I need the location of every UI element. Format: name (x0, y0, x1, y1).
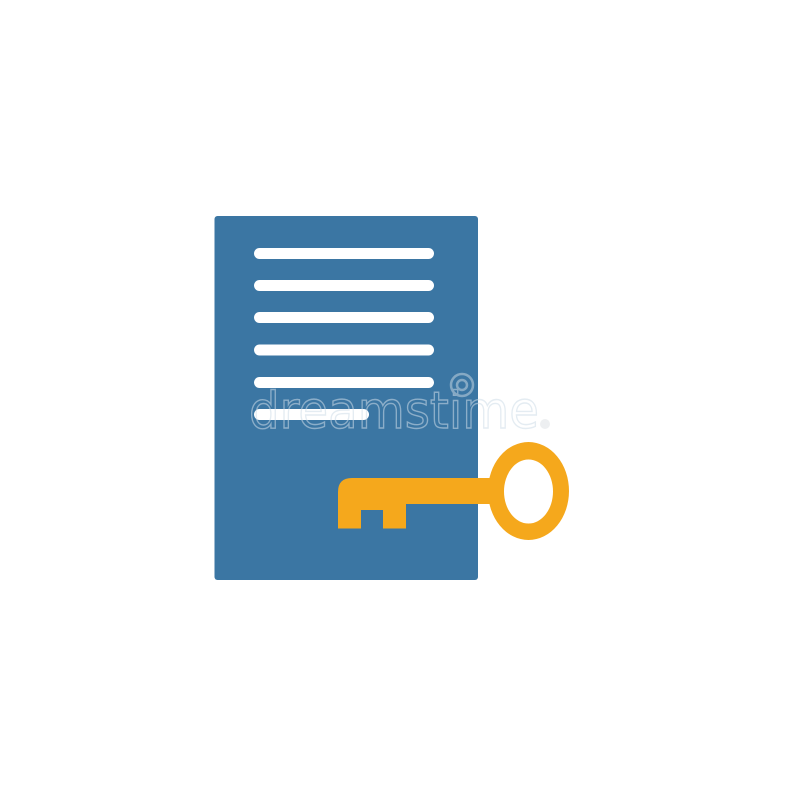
watermark wordmark: dreamstime (249, 382, 539, 441)
watermark: dreamstime (249, 374, 550, 441)
panel: blue document (214, 216, 478, 580)
text lines on document (254, 248, 434, 420)
watermark spiral (451, 374, 473, 396)
watermark dot (540, 419, 550, 429)
icon: orange key (338, 442, 569, 540)
